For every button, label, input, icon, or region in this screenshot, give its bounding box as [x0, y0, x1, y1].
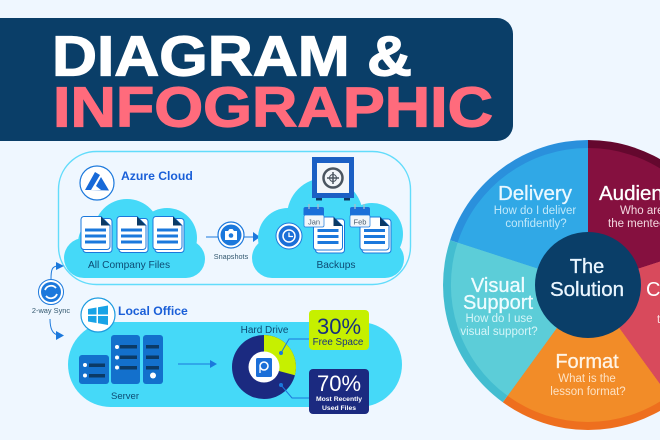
segment: Visual Support: Visual: [471, 275, 525, 297]
hub: The Solution: The: [570, 256, 604, 278]
callout leader: used files: [280, 384, 309, 398]
heading: Azure Cloud: Azure Cloud: [121, 169, 193, 183]
cloud: all company files: [64, 199, 205, 278]
segment: Visual Support: [443, 240, 588, 402]
segment: Content: [588, 240, 660, 402]
segment: Visual Support: visual support?: [460, 326, 538, 338]
segment: Format: What is the: [558, 373, 616, 385]
callout: 30% free space: Free Space: [313, 337, 364, 348]
heading: Local Office: Local Office: [118, 304, 188, 318]
callout leader: free space: [280, 339, 309, 354]
arrow: files to snapshots: [206, 236, 218, 238]
title line: Infographic: INFOGRAPHIC: [53, 76, 493, 140]
panel: Local Office: [68, 298, 402, 414]
label: 2-way Sync: 2-way Sync: [32, 306, 70, 315]
icon: calendar Jan: [304, 204, 324, 227]
arrow: snapshots to backups: [244, 232, 260, 242]
callout: 30% free space: 30%: [317, 314, 361, 339]
icon: Azure logo: [80, 166, 114, 200]
hub: The Solution: Solution: [550, 278, 624, 301]
title banner: [0, 18, 513, 141]
segment: Visual Support: Support: [463, 292, 533, 314]
segment: Delivery: How do I deliver: [494, 205, 576, 217]
panel: Azure Cloud: [58, 152, 410, 284]
icon: safe: [312, 157, 354, 200]
donut chart: hard drive usage: [232, 335, 296, 399]
icon: server: [79, 335, 163, 384]
label: Backups: Backups: [316, 260, 356, 271]
callout: 70% most recently used files: [309, 369, 369, 414]
hub: The Solution: [535, 232, 641, 338]
callout: 70% most recently used files: 70%: [317, 371, 361, 396]
cloud: backups: [252, 178, 404, 278]
icon: file 1: [81, 216, 112, 252]
icon: calendar Feb: [350, 204, 370, 227]
icon: calendar Feb: Feb: [354, 218, 366, 226]
icon: backup file 2: [360, 217, 391, 253]
callout: 30% free space: [309, 310, 369, 350]
icon: history clock: [276, 223, 302, 249]
callout: 70% most recently used files: Used Files: [322, 405, 356, 412]
icon: Windows logo: [81, 298, 115, 332]
icon: camera snapshot: [218, 222, 244, 248]
icon: file 3: [153, 216, 184, 252]
arrow: server to hard drive: [178, 360, 217, 368]
label: Server: Server: [111, 391, 139, 402]
title line: Diagram &: DIAGRAM &: [52, 24, 412, 88]
callout: 70% most recently used files: Most Recently: [316, 396, 362, 403]
segment: Audience: [588, 140, 660, 285]
icon: file 2: [117, 216, 148, 252]
segment: Format: Format: [555, 351, 619, 373]
segment: Delivery: confidently?: [505, 218, 567, 230]
icon: calendar Jan: Jan: [308, 218, 320, 226]
icon: 2-way sync arrows: [38, 262, 64, 340]
icon: drive: [256, 358, 272, 377]
label: Snapshots: Snapshots: [214, 252, 249, 261]
label: All Company Files: All Company Files: [88, 260, 170, 271]
segment: Format: [503, 285, 660, 430]
icon: backup file 1: [314, 217, 344, 253]
segment: Delivery: [450, 140, 588, 285]
segment: Format: lesson format?: [550, 386, 626, 398]
chart: solution wheel: [443, 140, 660, 430]
label: Hard Drive: Hard Drive: [241, 325, 289, 336]
segment: Delivery: Delivery: [498, 182, 573, 205]
segment: Visual Support: How do I use: [465, 313, 533, 325]
